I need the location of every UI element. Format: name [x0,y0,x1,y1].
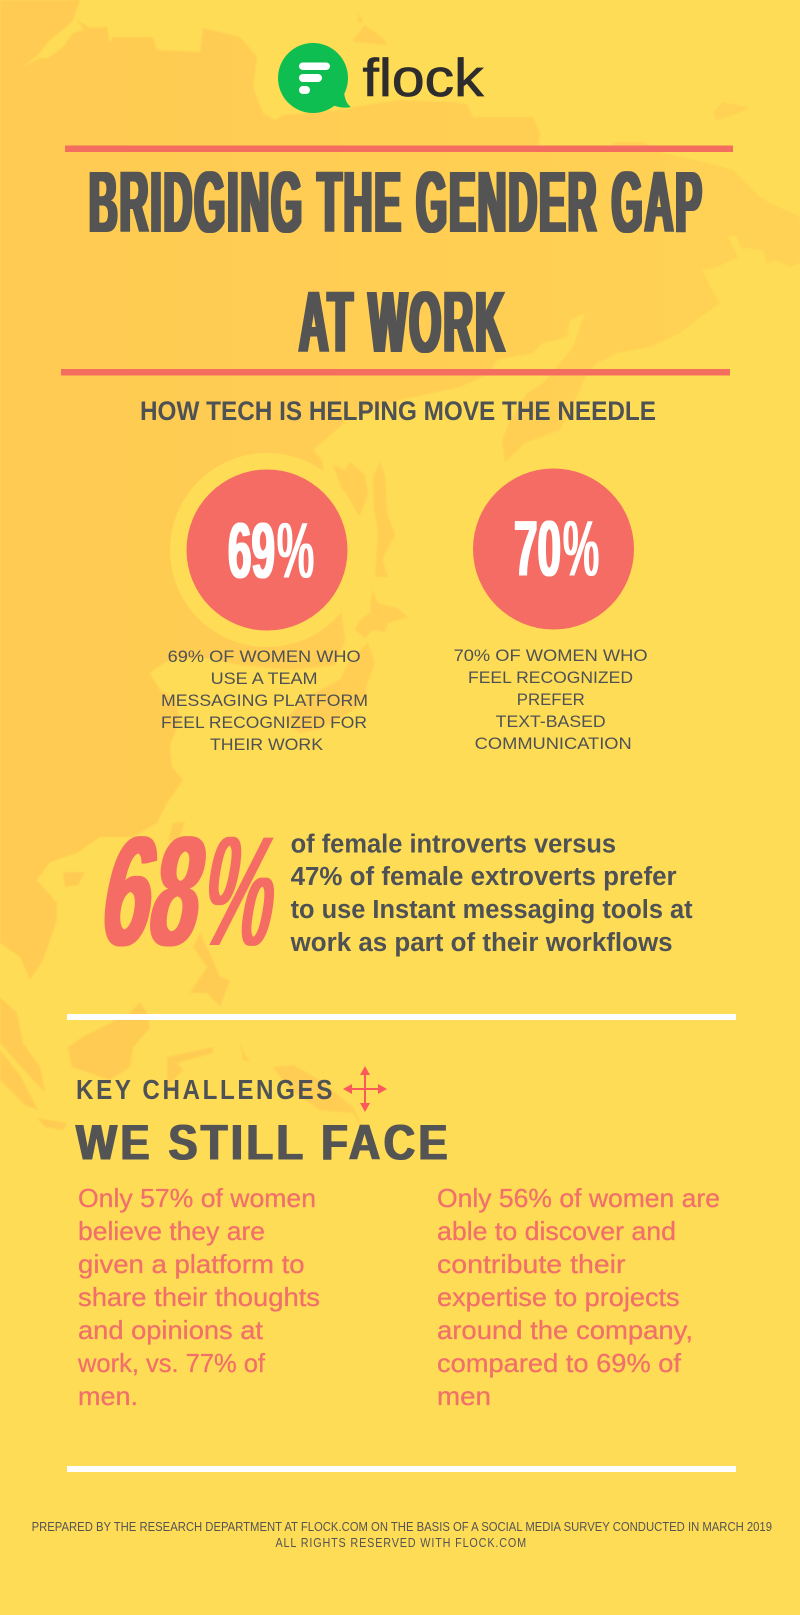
circle [186,470,348,630]
number: % [277,506,314,594]
caption: TEXT-BASED [496,712,606,731]
text block: right challenge [437,1183,720,1411]
text block: left challenge: Only 57% of women [78,1183,316,1213]
caption: THEIR WORK [210,735,324,754]
top red rule [65,146,733,152]
logo: flock [278,43,484,113]
text block: introverts versus extroverts: of female introverts versus [291,830,616,858]
text block: introverts versus extroverts: 47% of female extroverts prefer [291,863,677,891]
text block: introverts versus extroverts [290,830,693,957]
number: 70 [514,504,561,592]
number: 69 [228,506,275,594]
wordmark: flock [362,49,484,108]
text block: right challenge: men [437,1381,491,1411]
text block: right challenge: compared to 69% of [437,1348,682,1378]
caption: PREFER [517,690,585,709]
footer note: ALL RIGHTS RESERVED WITH FLOCK.COM [276,1535,527,1550]
subtitle: HOW TECH IS HELPING MOVE THE NEEDLE [140,396,656,426]
stat: 69% [161,453,368,754]
caption: USE A TEAM [211,669,318,688]
white divider top [67,1014,736,1020]
text block: right challenge: able to discover and [437,1216,676,1246]
circle ring [170,453,364,647]
text block: right challenge: Only 56% of women are [437,1183,720,1213]
caption: FEEL RECOGNIZED [468,668,633,687]
stat: 70% [454,468,648,753]
text block: left challenge: and opinions at [78,1315,264,1345]
text block: left challenge: work, vs. 77% of [77,1348,266,1378]
caption: COMMUNICATION [475,734,632,753]
icon: chat bubble [278,43,351,113]
text block: right challenge: contribute their [437,1249,626,1279]
caption: MESSAGING PLATFORM [161,691,368,710]
text block: right challenge: expertise to projects [437,1282,680,1312]
big stat: 68%: 68 [91,805,218,979]
text block: left challenge: believe they are [78,1216,265,1246]
white divider bottom [67,1466,736,1472]
text block: left challenge: men. [78,1381,138,1411]
caption [454,646,648,753]
text block: left challenge: given a platform to [78,1249,305,1279]
icon: four-way arrow [343,1066,387,1112]
heading: key challenges: KEY CHALLENGES [76,1074,335,1105]
text block: left challenge [77,1183,320,1411]
world map background [0,0,800,1137]
text block: left challenge: share their thoughts [78,1282,320,1312]
heading: we still face: WE STILL FACE [76,1114,451,1170]
text block: right challenge: around the company, [437,1315,693,1345]
big stat: 68%: % [191,805,292,979]
lower red rule [61,369,730,376]
footer note [32,1519,772,1550]
text block: introverts versus extroverts: to use Instant messaging tools at [291,896,693,924]
caption: FEEL RECOGNIZED FOR [161,713,367,732]
title [89,154,704,371]
number: % [563,504,599,592]
caption: 69% OF WOMEN WHO [168,647,361,666]
caption [161,647,368,754]
caption: 70% OF WOMEN WHO [454,646,648,665]
title: AT WORK [299,274,507,371]
text block: introverts versus extroverts: work as part of their workflows [290,929,673,957]
circle [473,468,634,630]
